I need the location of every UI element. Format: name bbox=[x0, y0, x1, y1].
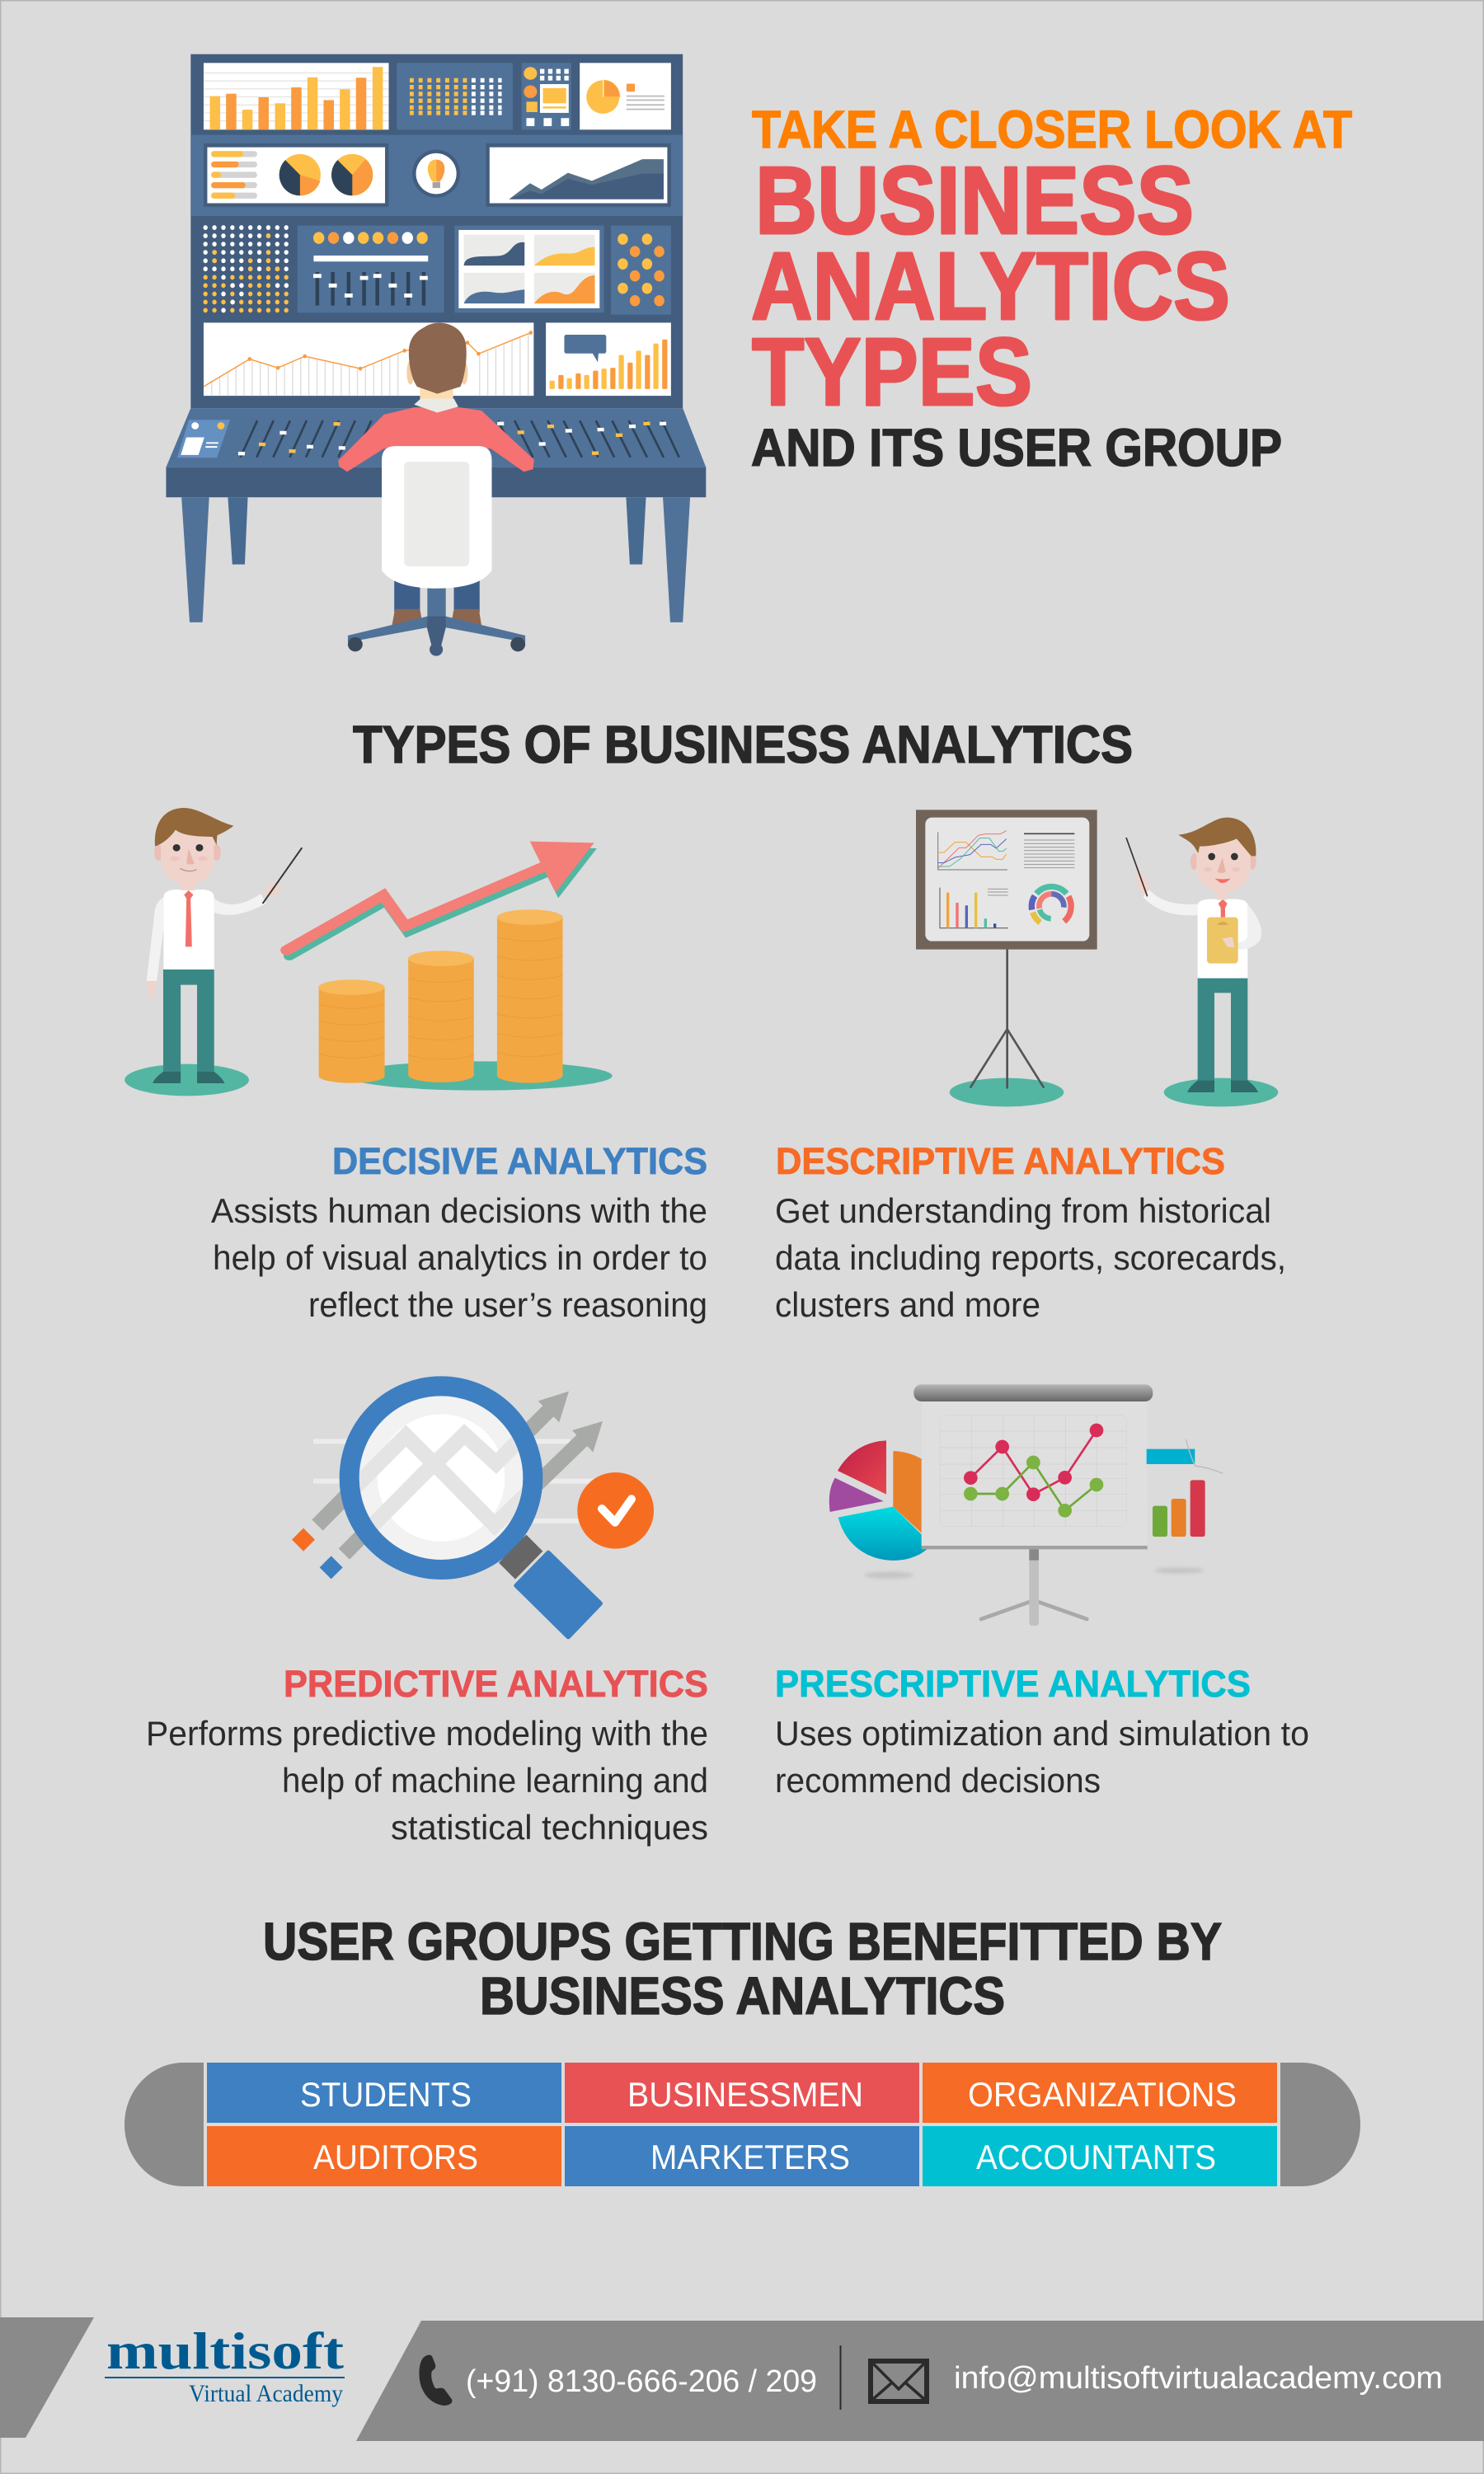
logo: multisoft virtual academy: multisoft bbox=[106, 2321, 345, 2380]
icon: phone bbox=[419, 2354, 452, 2406]
text block: prescriptive analytics bbox=[775, 1663, 1309, 1800]
mixer panel bbox=[298, 226, 444, 312]
line chart screen bbox=[204, 322, 533, 396]
screen stand bbox=[981, 1549, 1087, 1626]
cell: organizations: ORGANIZATIONS bbox=[968, 2075, 1237, 2114]
body: data including reports, scorecards, bbox=[775, 1238, 1286, 1277]
square dot matrix panel bbox=[397, 63, 513, 129]
section heading: user groups: USER GROUPS GETTING BENEFITTED BY bbox=[263, 1912, 1222, 1971]
right cap bbox=[1280, 2063, 1360, 2186]
heading: PREDICTIVE ANALYTICS bbox=[284, 1663, 708, 1705]
pie chart screen bbox=[580, 63, 671, 129]
body: reflect the user’s reasoning bbox=[308, 1285, 707, 1324]
coin stack small bbox=[318, 979, 385, 1083]
dot matrix bbox=[205, 228, 290, 310]
console cabinet bbox=[190, 54, 683, 408]
cell: marketers: MARKETERS bbox=[650, 2138, 850, 2176]
cell: marketers bbox=[565, 2126, 919, 2186]
title line 4: TYPES bbox=[752, 318, 1032, 425]
left cap bbox=[124, 2063, 204, 2186]
body: Performs predictive modeling with the bbox=[146, 1714, 708, 1753]
cell: accountants bbox=[923, 2126, 1277, 2186]
title line 5: AND ITS USER GROUP bbox=[751, 418, 1282, 477]
email: info@multisoftvirtualacademy.com bbox=[954, 2361, 1443, 2396]
progress bars and pies screen bbox=[204, 143, 388, 207]
logo: multisoft virtual academy bbox=[105, 2321, 345, 2407]
presentation board bbox=[916, 810, 1097, 950]
donut chart bbox=[1031, 886, 1071, 922]
body: clusters and more bbox=[775, 1285, 1040, 1324]
cell: businessmen bbox=[565, 2063, 919, 2123]
icon: lightbulb bbox=[412, 150, 460, 198]
footer left stripe bbox=[0, 2317, 94, 2438]
illustration: presenter with chart board bbox=[916, 810, 1278, 1106]
body: Uses optimization and simulation to bbox=[775, 1714, 1309, 1753]
body: Assists human decisions with the bbox=[211, 1191, 707, 1230]
legs and chair base bbox=[348, 580, 525, 656]
line chart bbox=[964, 1424, 1103, 1518]
phone number: (+91) 8130-666-206 / 209 bbox=[466, 2364, 817, 2399]
footer contact bar bbox=[356, 2321, 1484, 2441]
text block: predictive analytics bbox=[146, 1663, 708, 1847]
presenter bbox=[1126, 818, 1261, 1092]
cell: students: STUDENTS bbox=[300, 2075, 472, 2114]
office chair back bbox=[382, 446, 491, 589]
presenter bbox=[147, 808, 302, 1083]
body: recommend decisions bbox=[775, 1761, 1101, 1800]
heading: DECISIVE ANALYTICS bbox=[332, 1140, 707, 1182]
body bbox=[211, 1191, 707, 1324]
icon: check badge bbox=[577, 1472, 654, 1549]
projection screen bbox=[913, 1384, 1153, 1549]
hero illustration: analyst at dashboard console bbox=[166, 54, 706, 656]
ground shadows bbox=[124, 1061, 613, 1096]
control panel with icons bbox=[522, 63, 571, 129]
body bbox=[775, 1714, 1309, 1800]
title block bbox=[751, 100, 1352, 477]
text block: descriptive analytics bbox=[775, 1140, 1286, 1324]
body: help of machine learning and bbox=[282, 1761, 708, 1800]
body bbox=[775, 1191, 1286, 1324]
body: help of visual analytics in order to bbox=[213, 1238, 707, 1277]
cell: auditors: AUDITORS bbox=[313, 2138, 478, 2176]
illustration: presenter with coin stacks bbox=[124, 808, 613, 1096]
bar chart screen bbox=[204, 63, 388, 129]
cell: accountants: ACCOUNTANTS bbox=[976, 2138, 1216, 2176]
body bbox=[146, 1714, 708, 1847]
divider bbox=[839, 2345, 841, 2410]
user group table bbox=[124, 2063, 1360, 2186]
heading: PRESCRIPTIVE ANALYTICS bbox=[775, 1663, 1251, 1705]
magnifier handle bbox=[499, 1535, 600, 1637]
desk sliders bbox=[238, 420, 679, 458]
body: statistical techniques bbox=[391, 1808, 708, 1847]
illustration: magnifying glass over trend arrows bbox=[292, 1386, 654, 1637]
section heading: types: TYPES OF BUSINESS ANALYTICS bbox=[353, 715, 1133, 774]
magnifier lens bbox=[340, 1376, 542, 1580]
orange and yellow dot panel bbox=[611, 226, 671, 315]
background stripes bbox=[313, 1441, 594, 1521]
bar chart screen with speech bubble bbox=[546, 322, 671, 396]
cell: organizations bbox=[923, 2063, 1277, 2123]
title line 1: TAKE A CLOSER LOOK AT bbox=[752, 100, 1352, 159]
cell: businessmen: BUSINESSMEN bbox=[627, 2075, 863, 2114]
icon: envelope bbox=[871, 2361, 927, 2401]
cell: students bbox=[207, 2063, 561, 2123]
illustration: projector screen with charts bbox=[829, 1384, 1223, 1626]
section heading: user groups: BUSINESS ANALYTICS bbox=[480, 1966, 1005, 2026]
section heading: user groups bbox=[263, 1912, 1222, 2026]
analyst seen from behind bbox=[338, 323, 534, 472]
ground shadows bbox=[950, 1078, 1278, 1106]
area chart screen bbox=[486, 143, 671, 207]
tripod bbox=[970, 950, 1044, 1087]
pie chart bbox=[829, 1440, 932, 1579]
trend arrows bbox=[317, 1392, 603, 1554]
title line 3: ANALYTICS bbox=[751, 232, 1230, 340]
logo: multisoft virtual academy: Virtual Academy bbox=[189, 2380, 343, 2407]
desk bbox=[166, 408, 706, 622]
heading: DESCRIPTIVE ANALYTICS bbox=[776, 1140, 1225, 1182]
four small area charts bbox=[454, 226, 604, 312]
diamonds bbox=[292, 1528, 343, 1579]
coin stack tall bbox=[497, 909, 563, 1083]
rising arrow bbox=[287, 842, 597, 955]
title line 2: BUSINESS bbox=[755, 147, 1194, 254]
body: Get understanding from historical bbox=[775, 1191, 1271, 1230]
cell: auditors bbox=[207, 2126, 561, 2186]
coin stack medium bbox=[408, 951, 474, 1082]
document with bar chart bbox=[1147, 1439, 1223, 1574]
text block: decisive analytics bbox=[211, 1140, 707, 1324]
